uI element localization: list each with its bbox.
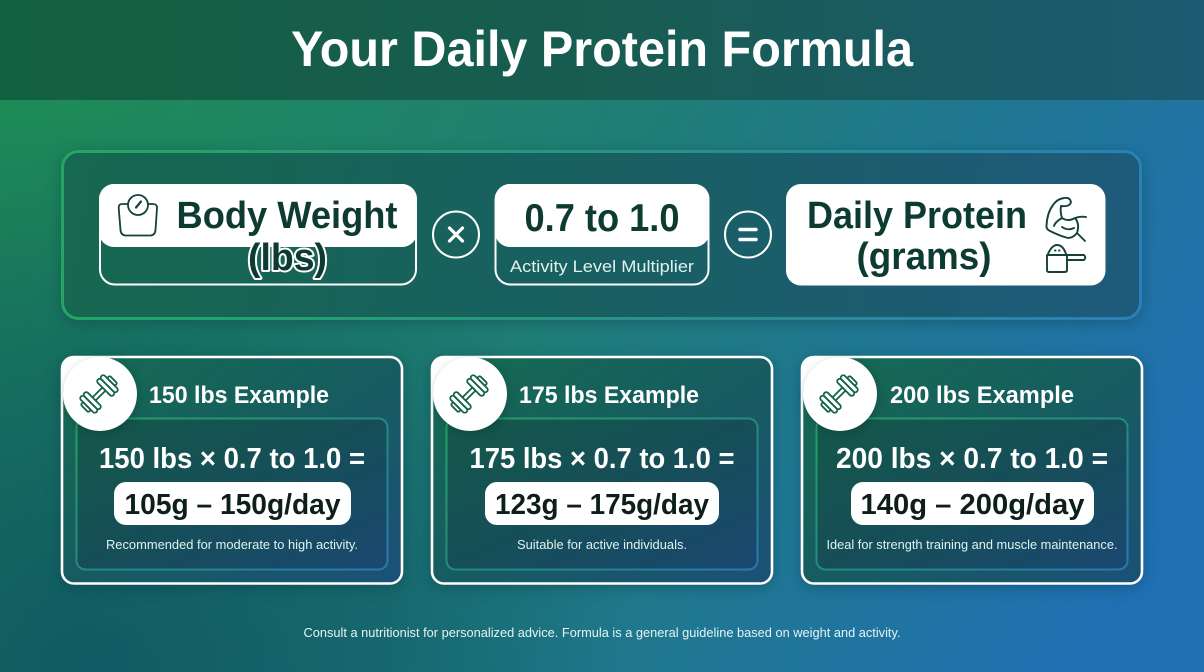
equation: 150 lbs × 0.7 to 1.0 = <box>99 443 365 475</box>
equation: 200 lbs × 0.7 to 1.0 = <box>836 443 1108 475</box>
result pill <box>114 482 351 525</box>
multiplier box <box>495 184 710 284</box>
icon: dumbbell badge <box>61 356 137 431</box>
multiplier value: 0.7 to 1.0 <box>524 197 680 240</box>
icon: flexed arm <box>1046 198 1086 241</box>
note: Recommended for moderate to high activity. <box>106 537 358 552</box>
equation: 175 lbs × 0.7 to 1.0 = <box>470 443 734 475</box>
header band <box>0 0 1204 100</box>
card: 150 lbs example <box>61 356 402 584</box>
note: Ideal for strength training and muscle maintenance. <box>826 537 1118 552</box>
result pill: 123g – 175g/day <box>495 489 709 521</box>
icon: dumbbell badge <box>801 356 877 431</box>
body weight box <box>99 184 417 284</box>
result pill: 140g – 200g/day <box>860 489 1084 521</box>
card heading: 200 lbs Example <box>890 382 1074 409</box>
daily protein box <box>786 184 1106 286</box>
inner panel <box>446 418 758 570</box>
title: Your Daily Protein Formula <box>291 21 914 77</box>
card heading: 175 lbs Example <box>519 382 699 409</box>
label: lbs: (lbs) <box>248 237 327 279</box>
inner panel <box>816 418 1128 570</box>
label: body weight: Body Weight <box>176 195 398 237</box>
multiplier caption: Activity Level Multiplier <box>510 257 694 276</box>
icon: scale <box>119 195 157 236</box>
note: Suitable for active individuals. <box>517 537 687 552</box>
icon: protein scoop <box>1047 245 1085 272</box>
panel: formula <box>62 152 1140 318</box>
result pill <box>851 482 1094 525</box>
card: 200 lbs example <box>801 356 1142 584</box>
icon: dumbbell badge <box>431 356 507 431</box>
inner panel <box>76 418 388 570</box>
label: daily protein: Daily Protein <box>807 195 1027 237</box>
card: 175 lbs example <box>431 356 772 584</box>
result pill: 105g – 150g/day <box>124 489 340 521</box>
footer note: Consult a nutritionist for personalized advice. Formula is a general guideline based on weight and activity. <box>304 625 900 640</box>
card heading: 150 lbs Example <box>149 382 329 409</box>
label: grams: (grams) <box>856 236 992 278</box>
multiply symbol <box>433 212 479 258</box>
equals symbol <box>725 212 771 258</box>
